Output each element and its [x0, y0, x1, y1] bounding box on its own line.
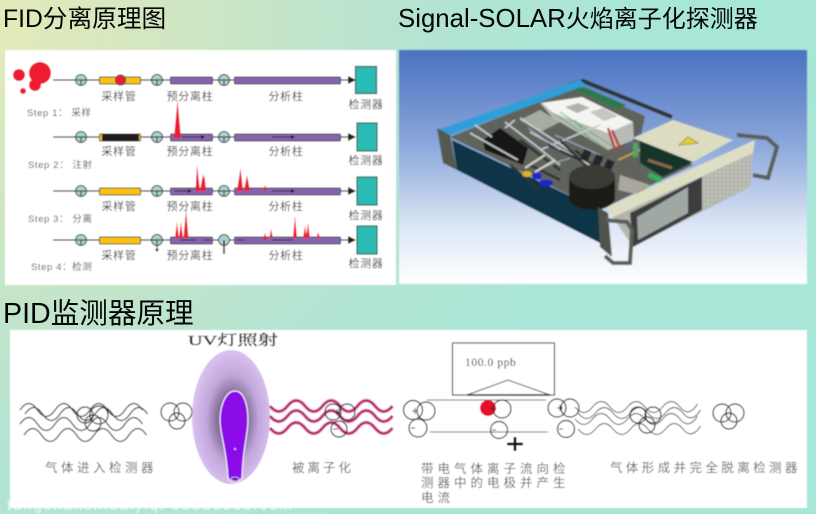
icon: UV lamp glow — [192, 350, 270, 484]
label: UV lamp: UV灯照射 — [188, 333, 278, 349]
gas molecules entering — [20, 403, 192, 442]
step 4 row: 分析柱 — [268, 248, 304, 262]
illustration: detector chassis — [437, 80, 777, 263]
step 4 row: Step 4：检测 — [31, 261, 92, 273]
step 2 row: 检测器 — [348, 153, 384, 167]
step 2 row: 预分离柱 — [167, 144, 213, 158]
ionized gas — [270, 400, 392, 437]
caption: ionized: 被离子化 — [292, 460, 354, 475]
step 4 row — [31, 210, 384, 273]
caption: gas enters: 气体进入检测器 — [45, 460, 157, 475]
caption: ions flow to electrode — [421, 461, 570, 505]
step 2 row: 采样管 — [101, 144, 137, 158]
caption: ions flow to electrode: 测器中的电极并产生 — [421, 475, 570, 490]
icon: sample blobs — [13, 62, 51, 94]
panel: FID diagram — [5, 50, 396, 285]
title: FID: FID分离原理图 — [3, 5, 166, 33]
caption: ions flow to electrode: 带电气体离子流向检 — [421, 461, 570, 476]
title: PID: PID监测器原理 — [3, 298, 194, 330]
step 1 row: 分析柱 — [268, 89, 304, 103]
step 2 row: 分析柱 — [268, 144, 304, 158]
step 3 row: 分析柱 — [268, 199, 304, 213]
caption: gas exits: 气体形成并完全脱离检测器 — [610, 460, 801, 475]
panel: PID diagram — [7, 330, 807, 514]
step 3 row — [28, 165, 384, 225]
gas leaving — [575, 402, 744, 434]
step 3 row: 采样管 — [101, 199, 137, 213]
step 1 row — [27, 66, 384, 119]
electrodes and ions — [404, 399, 579, 451]
step 3 row: 检测器 — [348, 208, 384, 222]
step 4 row: 预分离柱 — [167, 248, 213, 262]
step 1 row: 采样管 — [101, 89, 137, 103]
step 3 row: 预分离柱 — [167, 199, 213, 213]
step 2 row: Step 2： 注射 — [28, 159, 93, 171]
detector readout: 100.0 ppb — [465, 357, 516, 369]
detector readout — [452, 343, 554, 395]
step 3 row: Step 3： 分离 — [28, 213, 93, 225]
caption: ions flow to electrode: 电流 — [421, 491, 454, 505]
step 1 row: 检测器 — [348, 97, 384, 111]
panel: Signal-SOLAR photo — [399, 50, 807, 284]
step 2 row — [28, 100, 384, 171]
step 4 row: 采样管 — [101, 248, 137, 262]
step 1 row: Step 1： 采样 — [27, 107, 92, 119]
step 4 row: 检测器 — [348, 256, 384, 270]
title: Signal-SOLAR: Signal-SOLAR火焰离子化探测器 — [398, 5, 758, 33]
watermark: tangshanshidaiyiqi 88888888.com — [7, 497, 292, 514]
step 1 row: 预分离柱 — [167, 89, 213, 103]
